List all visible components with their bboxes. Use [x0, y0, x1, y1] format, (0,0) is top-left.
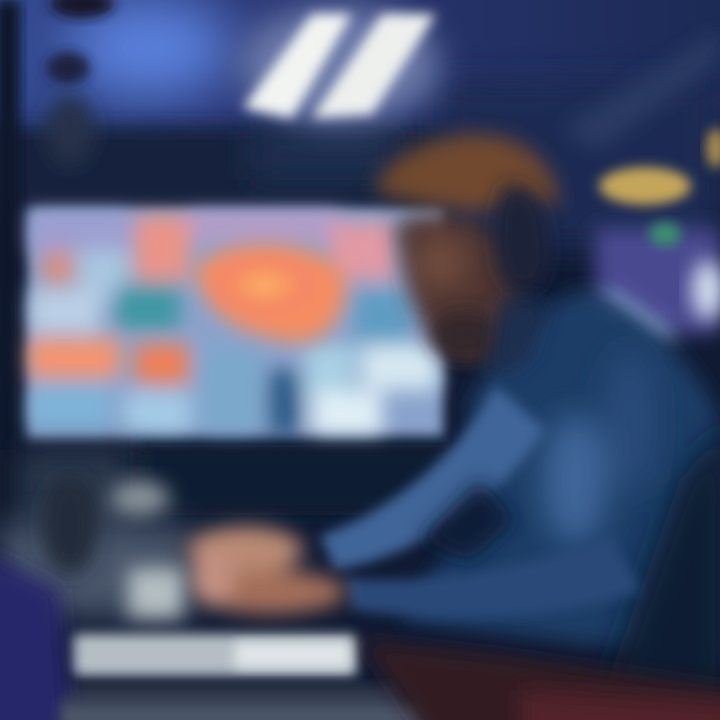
- monitor with colourful tiles: [28, 208, 443, 438]
- person: [320, 134, 720, 720]
- face: [395, 216, 518, 362]
- dark gap between arms: [420, 480, 515, 560]
- hair: [375, 134, 558, 212]
- keyboard: [60, 568, 400, 707]
- hands on keyboard: [187, 526, 346, 614]
- monitor tiles: [28, 212, 437, 437]
- left pillar and dark camera shapes: [0, 0, 114, 520]
- ceiling light panels: [240, 5, 440, 125]
- sweater arm lower: [345, 535, 640, 617]
- sweater torso: [400, 290, 720, 660]
- sweater highlights: [543, 350, 720, 720]
- neck: [490, 300, 550, 380]
- headphones: [494, 184, 550, 293]
- beard: [431, 311, 499, 359]
- desk surface: [0, 550, 720, 720]
- right background screens and lamp: [595, 128, 720, 340]
- icon: yellow lamp: [599, 167, 691, 205]
- desk area under monitor: [0, 445, 450, 615]
- central orange burst: [195, 244, 346, 342]
- sweater arm upper: [320, 385, 545, 570]
